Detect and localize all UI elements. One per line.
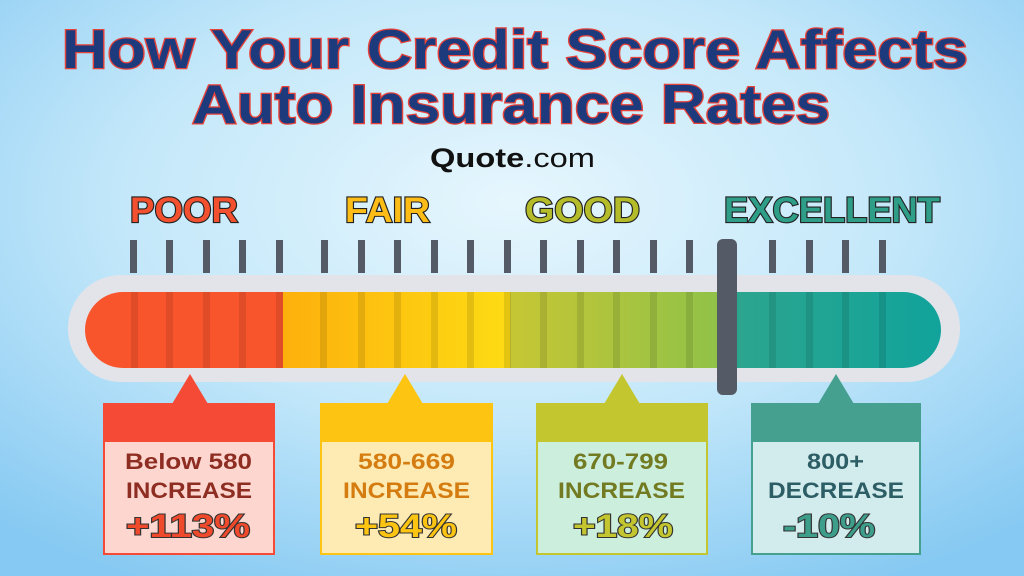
box: good <box>537 374 707 554</box>
box: poor: INCREASE <box>126 478 252 503</box>
box: excellent <box>752 374 920 554</box>
title: Auto Insurance Rates <box>192 73 830 135</box>
box: fair: +54% <box>355 508 457 544</box>
title: How Your Credit Score Affects <box>62 18 968 80</box>
box: poor <box>104 374 274 554</box>
category labels: EXCELLENT <box>724 191 940 230</box>
title <box>62 18 968 135</box>
category labels: GOOD <box>525 191 640 230</box>
box: fair: INCREASE <box>343 478 470 503</box>
box: excellent: DECREASE <box>768 478 904 503</box>
category labels: POOR <box>130 191 238 230</box>
category labels <box>130 191 940 230</box>
box: poor: +113% <box>126 508 250 544</box>
box: good: +18% <box>573 508 673 544</box>
tick marks <box>130 240 886 273</box>
score marker <box>717 239 737 395</box>
box: good: INCREASE <box>558 478 685 503</box>
gauge bar <box>68 275 960 382</box>
box: excellent: -10% <box>783 508 875 544</box>
box: excellent: 800+ <box>807 449 864 474</box>
category labels: FAIR <box>345 191 430 230</box>
brand: Quote.com: Quote .com <box>430 143 595 173</box>
box: fair: 580-669 <box>358 449 455 474</box>
box: fair <box>321 374 492 554</box>
box: poor: Below 580 <box>125 449 252 474</box>
box: good: 670-799 <box>573 449 668 474</box>
